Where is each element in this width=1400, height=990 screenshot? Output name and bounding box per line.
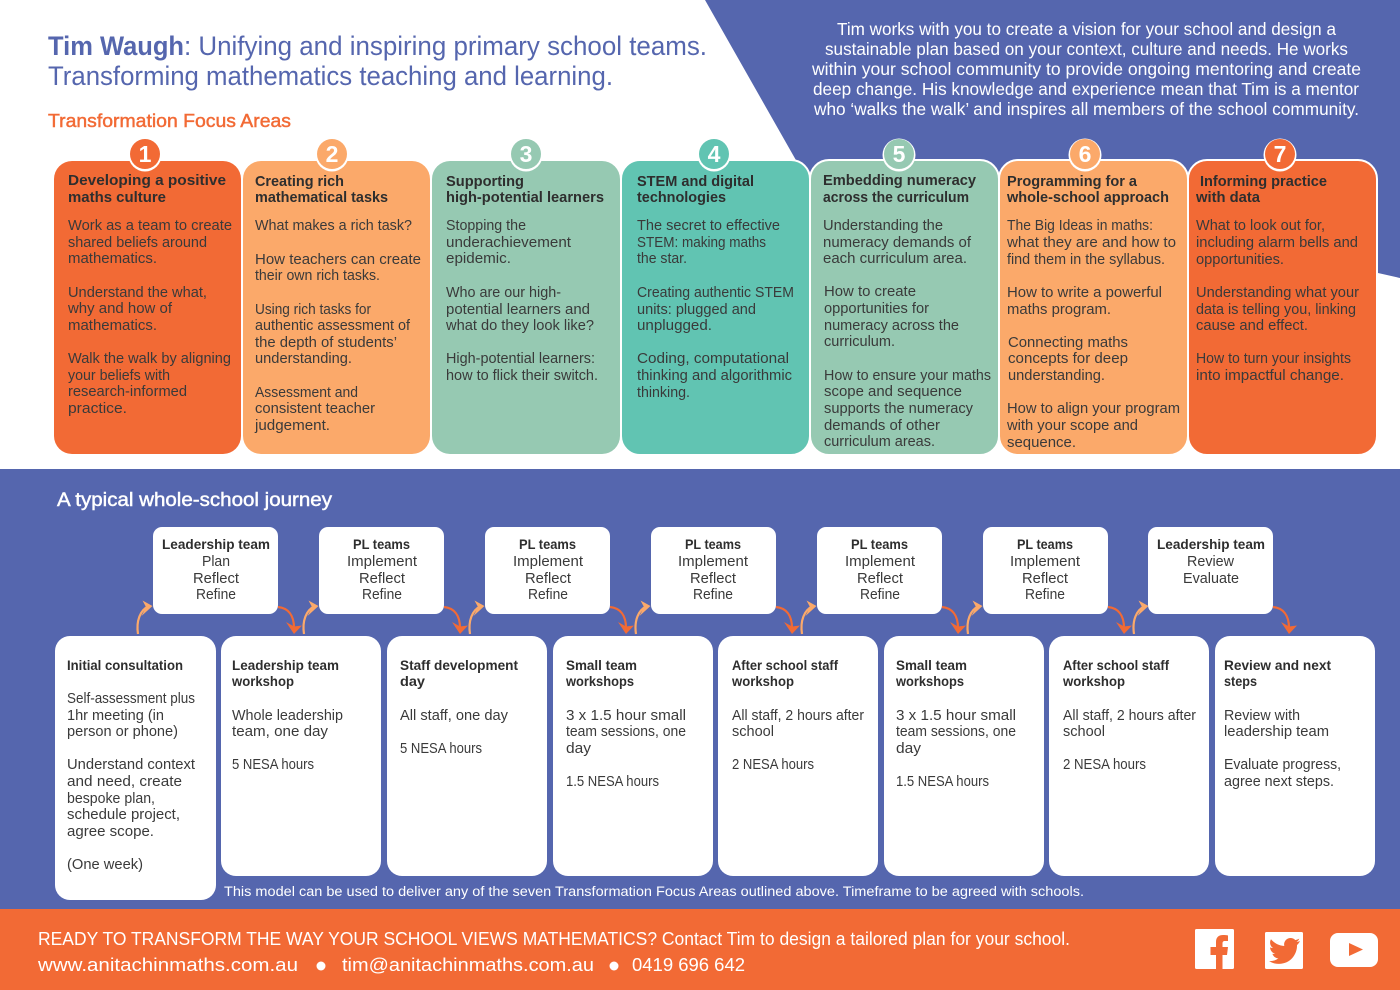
body text 4: the star. <box>637 251 687 267</box>
team box 7: Evaluate <box>1183 571 1239 587</box>
body text 7: opportunities. <box>1196 252 1284 268</box>
body text 4: units: plugged and <box>637 302 756 318</box>
body text 4: STEM: making maths <box>637 235 766 251</box>
arrow up 6 <box>967 600 982 634</box>
arrow down 7 <box>1273 607 1297 634</box>
body text 5: demands of other <box>824 418 940 434</box>
title <box>48 31 707 91</box>
step box 2: leadership team workshop: 5 NESA hours <box>232 757 314 773</box>
body text 4: Coding, computational <box>637 351 789 367</box>
body text 2: understanding. <box>255 351 352 367</box>
footer call to action: READY TO TRANSFORM THE WAY YOUR SCHOOL VIEWS MATHEMATICS? Contact Tim to design a tailored plan for your school. <box>38 929 1070 949</box>
step box 6: small team workshops <box>884 636 1044 876</box>
step box 7: after school staff workshop: After school staff <box>1063 658 1169 673</box>
heading 6 <box>1006 173 1169 206</box>
number badge 2 <box>316 138 348 172</box>
body text 3: Stopping the <box>446 218 526 234</box>
body text 1: research-informed <box>68 384 187 400</box>
intro paragraph: deep change. His knowledge and experience mean that Tim is a mentor <box>813 79 1359 99</box>
arrow down 1 <box>278 607 302 634</box>
intro paragraph: Tim works with you to create a vision for your school and design a <box>837 19 1336 39</box>
heading 5: Embedding numeracy <box>823 172 977 189</box>
body text 6: find them in the syllabus. <box>1007 252 1165 268</box>
team box 3 <box>485 527 610 614</box>
team box 5 <box>817 527 942 614</box>
step box 5: after school staff workshop: After school staff <box>732 658 838 673</box>
body text 2: their own rich tasks. <box>255 268 380 284</box>
step box 2: leadership team workshop: Whole leadership <box>232 708 343 724</box>
team box 6: Implement <box>1010 554 1080 570</box>
heading 7 <box>1195 173 1327 206</box>
body text 2: judgement. <box>254 418 330 434</box>
panel: focus area 6 <box>999 138 1188 455</box>
body text 1: practice. <box>68 401 127 417</box>
body text 2: Using rich tasks for <box>255 302 371 318</box>
team box 4: Reflect <box>690 571 736 587</box>
team box 5: Implement <box>845 554 915 570</box>
body text 4: thinking and algorithmic <box>637 368 793 384</box>
body text 6: understanding. <box>1008 368 1105 384</box>
step box 1: initial consultation: person or phone) <box>67 724 178 740</box>
body text 7: into impactful change. <box>1196 368 1344 384</box>
team box 5: PL teams <box>851 537 908 552</box>
heading 3: Supporting <box>446 173 524 190</box>
heading 3: high-potential learners <box>446 189 604 206</box>
team box 3: Refine <box>528 587 568 603</box>
step box 8: review and next steps: steps <box>1224 674 1257 689</box>
heading 3 <box>446 173 604 206</box>
body text 7: Understanding what your <box>1196 285 1359 301</box>
step box 8: review and next steps: Evaluate progress, <box>1224 757 1341 773</box>
step box 8: review and next steps: agree next steps. <box>1224 774 1334 790</box>
heading 2: mathematical tasks <box>255 189 388 206</box>
body text 1: mathematics. <box>68 318 157 334</box>
number badge 5 <box>882 138 916 172</box>
title: Tim Waugh <box>48 31 184 61</box>
body text 6: sequence. <box>1007 435 1076 451</box>
step box 4: small team workshops: day <box>566 741 592 757</box>
body text 4 <box>637 218 794 401</box>
body text 2: authentic assessment of <box>255 318 411 334</box>
step box 3: staff development day: 5 NESA hours <box>400 741 482 757</box>
team box 4: PL teams <box>685 537 741 552</box>
icon: youtube <box>1330 933 1378 967</box>
team box 2: Reflect <box>359 571 405 587</box>
step box 6: small team workshops: workshops <box>895 674 964 689</box>
footer contact details: 0419 696 642 <box>632 955 745 975</box>
journey footnote: This model can be used to deliver any of the seven Transformation Focus Areas outlined above. Timeframe to be agreed with schools. <box>224 884 1084 899</box>
body text 5: numeracy demands of <box>823 235 972 251</box>
heading 1: maths culture <box>68 189 166 206</box>
body text 2 <box>254 218 421 434</box>
body text 5: supports the numeracy <box>824 401 974 417</box>
step box 4: small team workshops: workshops <box>565 674 634 689</box>
step box 3: staff development day: Staff development <box>400 658 518 673</box>
body text 4: unplugged. <box>637 318 712 334</box>
body text 5: curriculum areas. <box>824 434 935 450</box>
step box 6: small team workshops: 1.5 NESA hours <box>896 774 989 790</box>
body text 6: with your scope and <box>1006 418 1138 434</box>
body text 2: consistent teacher <box>255 401 375 417</box>
number badge 4 <box>698 138 730 172</box>
step box 1: initial consultation: Initial consultation <box>67 658 183 673</box>
heading 7: Informing practice <box>1200 173 1327 190</box>
body text 3: how to flick their switch. <box>446 368 598 384</box>
body text 7: How to turn your insights <box>1196 351 1351 367</box>
step box 7: after school staff workshop: All staff, 2 hours after <box>1063 708 1196 724</box>
journey heading: A typical whole-school journey <box>57 490 333 511</box>
body text 4: The secret to effective <box>637 218 780 234</box>
number badge 1 <box>128 138 162 172</box>
team box 1 <box>153 527 278 614</box>
body text 1: Walk the walk by aligning <box>68 351 231 367</box>
heading 5 <box>823 172 977 206</box>
team box 6: Reflect <box>1022 571 1068 587</box>
body text 2: Assessment and <box>255 385 358 401</box>
footer contact details: www.anitachinmaths.com.au <box>37 955 298 975</box>
title: Transforming mathematics teaching and learning. <box>48 61 613 91</box>
step box 8: review and next steps: leadership team <box>1224 724 1329 740</box>
team box 1: Leadership team <box>162 537 270 552</box>
heading 4 <box>637 173 754 206</box>
body text 3: what do they look like? <box>445 318 594 334</box>
team box 6: Refine <box>1025 587 1065 603</box>
step box 8: review and next steps: Review and next <box>1224 658 1331 673</box>
step box 4: small team workshops <box>553 636 713 876</box>
footer contact details <box>37 955 745 975</box>
body text 4: Creating authentic STEM <box>637 285 794 301</box>
panel: focus area 5 <box>810 138 999 455</box>
heading 1: Developing a positive <box>68 172 226 189</box>
step box 6: small team workshops: Small team <box>896 658 967 673</box>
step box 5: after school staff workshop: 2 NESA hours <box>732 757 814 773</box>
heading 4: STEM and digital <box>637 173 754 190</box>
intro paragraph: within your school community to provide ongoing mentoring and create <box>811 59 1361 79</box>
step box 7: after school staff workshop: school <box>1063 724 1105 740</box>
footer band <box>0 909 1400 990</box>
body text 5: opportunities for <box>824 301 929 317</box>
body text 5: numeracy across the <box>824 318 959 334</box>
step box 5: after school staff workshop: All staff, 2 hours after <box>732 708 864 724</box>
body text 5: curriculum. <box>824 334 895 350</box>
body text 7: including alarm bells and <box>1196 235 1358 251</box>
icon: facebook <box>1195 929 1234 969</box>
arrow up 3 <box>469 600 484 634</box>
step box 7: after school staff workshop <box>1049 636 1209 876</box>
team box 4: Implement <box>678 554 748 570</box>
step box 3: staff development day: day <box>400 674 425 689</box>
team box 6 <box>983 527 1108 614</box>
number badge 3: 3 <box>520 141 532 167</box>
icon: twitter <box>1265 932 1303 969</box>
heading 5: across the curriculum <box>823 189 969 206</box>
step box 4: small team workshops: 3 x 1.5 hour small <box>566 708 686 724</box>
step box 2: leadership team workshop: team, one day <box>232 724 329 740</box>
step box 1: initial consultation: Self-assessment plus <box>67 691 195 707</box>
number badge 6: 6 <box>1079 141 1091 167</box>
body text 6: The Big Ideas in maths: <box>1007 218 1153 234</box>
body text 6: How to align your program <box>1007 401 1180 417</box>
team box 2: PL teams <box>353 537 410 552</box>
heading 2 <box>255 173 388 206</box>
body text 6: How to write a powerful <box>1007 285 1162 301</box>
step box 8: review and next steps: Review with <box>1224 708 1300 724</box>
number badge 2: 2 <box>326 141 338 167</box>
team box 4: Refine <box>693 587 733 603</box>
team box 7 <box>1148 527 1273 614</box>
heading 4: technologies <box>637 189 726 206</box>
number badge 1: 1 <box>139 141 152 167</box>
title: : Unifying and inspiring primary school teams. <box>184 31 707 61</box>
panel: whole-school journey band <box>0 469 1400 910</box>
body text 1: Understand the what, <box>68 285 207 301</box>
step box 1: initial consultation: 1hr meeting (in <box>67 708 164 724</box>
body text 3: underachievement <box>446 235 571 251</box>
blue header shape <box>705 0 1400 300</box>
step box 6: small team workshops: team sessions, one <box>896 724 1016 740</box>
number badge 6 <box>1068 138 1102 172</box>
arrow up 2 <box>303 600 318 634</box>
step box 1: initial consultation: Understand context <box>67 757 195 773</box>
team box 7: Leadership team <box>1157 537 1265 552</box>
team box 5: Refine <box>860 587 900 603</box>
step box 1: initial consultation: bespoke plan, <box>67 791 155 807</box>
team box 1: Plan <box>202 554 230 570</box>
arrow up 4 <box>635 600 650 634</box>
arrow up 5 <box>801 600 816 634</box>
intro paragraph: sustainable plan based on your context, culture and needs. He works <box>825 39 1348 59</box>
team box 6: PL teams <box>1017 537 1073 552</box>
body text 7 <box>1196 218 1359 384</box>
step box 6: small team workshops: 3 x 1.5 hour small <box>896 708 1016 724</box>
step box 7: after school staff workshop: workshop <box>1062 674 1125 689</box>
arrow down 6 <box>1108 607 1132 634</box>
team box 1: Reflect <box>193 571 239 587</box>
step box 7: after school staff workshop: 2 NESA hours <box>1063 757 1146 773</box>
body text 5: each curriculum area. <box>823 251 967 267</box>
step box 1: initial consultation: and need, create <box>67 774 182 790</box>
body text 1: mathematics. <box>68 251 157 267</box>
body text 3 <box>445 218 598 384</box>
step box 2: leadership team workshop <box>221 636 381 876</box>
team box 4 <box>651 527 776 614</box>
body text 1: your beliefs with <box>68 368 170 384</box>
panel: focus area 3 <box>432 138 620 454</box>
team box 3: Reflect <box>525 571 571 587</box>
body text 4: thinking. <box>637 385 690 401</box>
body text 7: data is telling you, linking <box>1196 302 1356 318</box>
body text 2: What makes a rich task? <box>255 218 412 234</box>
body text 6: maths program. <box>1007 302 1111 318</box>
step box 4: small team workshops: 1.5 NESA hours <box>566 774 659 790</box>
body text 6: Connecting maths <box>1008 335 1128 351</box>
team box 3: Implement <box>513 554 583 570</box>
step box 4: small team workshops: Small team <box>566 658 637 673</box>
step box 6: small team workshops: day <box>896 741 922 757</box>
arrow down 4 <box>776 607 800 634</box>
section heading: focus areas: Transformation Focus Areas <box>48 110 291 131</box>
body text 6: concepts for deep <box>1008 351 1128 367</box>
step box 8: review and next steps <box>1215 636 1375 876</box>
panel: focus area 4 <box>621 138 810 455</box>
step box 5: after school staff workshop: school <box>732 724 774 740</box>
heading 6: whole-school approach <box>1006 189 1169 206</box>
step box 5: after school staff workshop <box>718 636 878 876</box>
number badge 3 <box>510 138 542 172</box>
heading 6: Programming for a <box>1007 173 1138 190</box>
step box 3: staff development day: All staff, one day <box>400 708 509 724</box>
body text 6 <box>1006 218 1180 451</box>
body text 3: Who are our high- <box>446 285 561 301</box>
intro paragraph: who ‘walks the walk’ and inspires all members of the school community. <box>813 99 1359 119</box>
team box 7: Review <box>1187 554 1234 570</box>
body text 2: the depth of students’ <box>255 335 397 351</box>
team box 2: Implement <box>347 554 417 570</box>
team box 2: Refine <box>362 587 402 603</box>
body text 7: cause and effect. <box>1196 318 1308 334</box>
heading 1 <box>68 172 226 206</box>
body text 5: How to ensure your maths <box>824 368 991 384</box>
team box 3: PL teams <box>519 537 576 552</box>
panel: focus area 2 <box>243 138 430 454</box>
body text 3: potential learners and <box>446 302 590 318</box>
body text 1: why and how of <box>67 301 173 317</box>
body text 1: Work as a team to create <box>68 218 232 234</box>
team box 2 <box>319 527 444 614</box>
arrow down 3 <box>610 607 634 634</box>
body text 1 <box>67 218 232 417</box>
body text 5: scope and sequence <box>824 384 962 400</box>
number badge 4: 4 <box>708 141 721 167</box>
arrow up 7 <box>1133 600 1148 634</box>
step box 4: small team workshops: team sessions, one <box>566 724 686 740</box>
body text 3: High-potential learners: <box>446 351 595 367</box>
step box 1: initial consultation: agree scope. <box>67 824 154 840</box>
body text 7: What to look out for, <box>1196 218 1325 234</box>
body text 2: How teachers can create <box>255 252 421 268</box>
number badge 7: 7 <box>1274 141 1286 167</box>
panel: focus area 7 <box>1188 138 1377 455</box>
step box 1: initial consultation: (One week) <box>67 857 143 873</box>
step box 1: initial consultation: schedule project, <box>67 807 180 823</box>
step box 2: leadership team workshop: Leadership team <box>232 658 339 673</box>
panel: focus area 1 <box>54 138 241 454</box>
body text 6: what they are and how to <box>1006 235 1176 251</box>
heading 2: Creating rich <box>255 173 344 190</box>
body text 5: How to create <box>824 284 916 300</box>
number badge 7 <box>1264 138 1296 172</box>
arrow up 1 <box>137 600 152 634</box>
team box 1: Refine <box>196 587 236 603</box>
intro paragraph <box>811 19 1361 119</box>
body text 5 <box>823 218 991 450</box>
step box 5: after school staff workshop: workshop <box>731 674 794 689</box>
number badge 5: 5 <box>893 141 906 167</box>
arrow down 5 <box>942 607 966 634</box>
body text 5: Understanding the <box>823 218 943 234</box>
arrow down 2 <box>444 607 468 634</box>
step box 2: leadership team workshop: workshop <box>231 674 294 689</box>
footer contact details: tim@anitachinmaths.com.au <box>342 955 594 975</box>
heading 7: with data <box>1195 189 1261 206</box>
step box 3: staff development day <box>387 636 547 876</box>
body text 3: epidemic. <box>446 251 511 267</box>
body text 1: shared beliefs around <box>68 235 207 251</box>
team box 5: Reflect <box>857 571 903 587</box>
step box 1: initial consultation <box>55 636 216 900</box>
